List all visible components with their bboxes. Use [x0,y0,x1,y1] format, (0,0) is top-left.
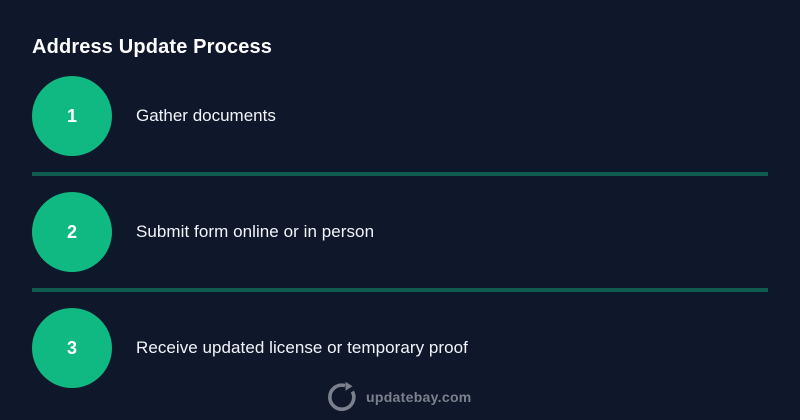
step 2 number circle: 2 [67,222,77,242]
step 3 number circle [32,308,112,388]
step 2 text: Submit form online or in person [136,222,374,241]
title: Address Update Process [32,36,272,58]
step 1 number circle [32,76,112,156]
step 1 number circle: 1 [67,106,77,126]
watermark: updatebay.com [328,382,472,411]
step 3 text: Receive updated license or temporary proof [136,338,468,357]
step 2 number circle [32,192,112,272]
step 3 number circle: 3 [67,338,77,358]
step 1 text: Gather documents [136,106,276,125]
watermark text: updatebay.com [366,389,472,405]
icon: refresh arrow [328,382,356,411]
